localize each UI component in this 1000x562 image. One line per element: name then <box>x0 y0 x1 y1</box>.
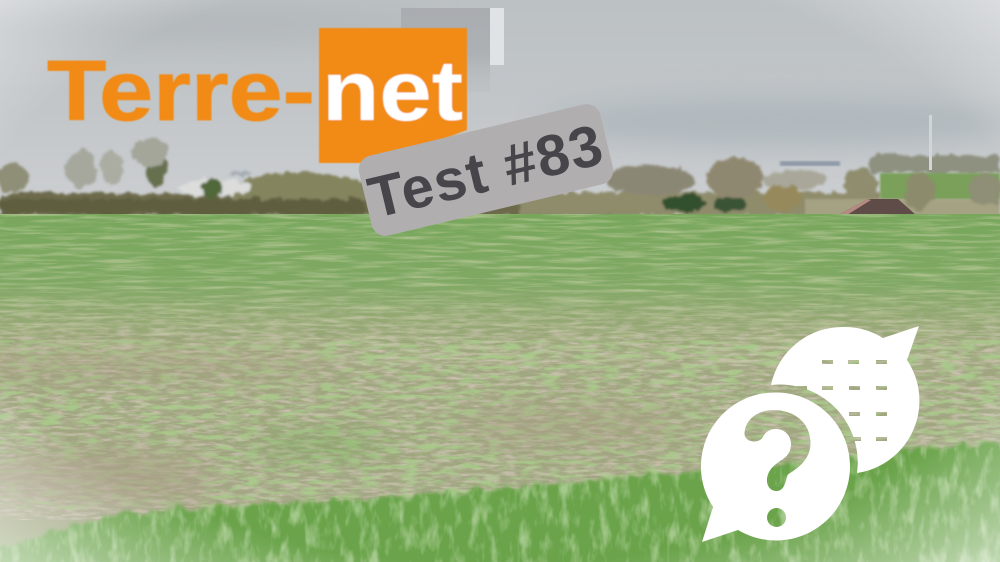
distant hill and right-hand meadow <box>780 115 1000 216</box>
logo text: net: net <box>322 44 463 139</box>
sky <box>0 0 1000 220</box>
field <box>0 214 1000 562</box>
badge: Test #83: Test #83 <box>362 112 609 231</box>
foreground grass verge <box>0 430 1000 562</box>
logo: Terre-net <box>47 28 467 163</box>
logo text: Terre-: Terre- <box>47 44 315 139</box>
icon: speech bubble with question mark <box>700 392 850 542</box>
logo backing shapes <box>401 8 504 92</box>
treeline <box>0 138 880 217</box>
icon: speech bubble with text dashes <box>771 326 920 473</box>
logo orange block <box>319 28 467 163</box>
